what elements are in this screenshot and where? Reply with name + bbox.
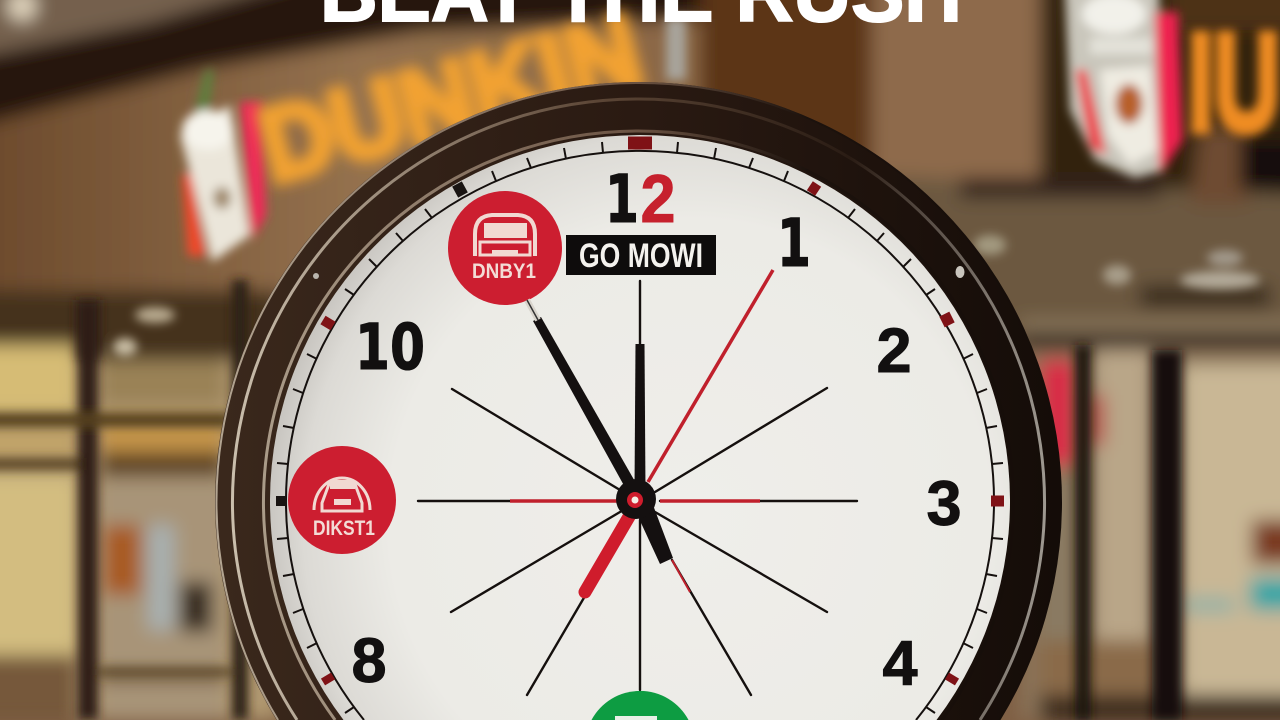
clock face: [270, 135, 1010, 720]
long black hand: [527, 300, 637, 491]
clock hands: [527, 300, 673, 592]
icon: red car badge lower: DIKST1: [313, 517, 375, 540]
vertical black hand: [634, 344, 646, 490]
hour numerals: 1: [777, 205, 811, 282]
clock: [215, 82, 1062, 720]
hour markers: [276, 143, 1004, 682]
hour numerals: 3: [926, 469, 962, 539]
label: go now: GO MOWI: [579, 237, 703, 275]
icon: green badge: [592, 691, 688, 720]
hour numerals: 2: [876, 316, 912, 386]
hour numerals: 2: [640, 161, 676, 237]
short black hand: [636, 505, 673, 564]
hour numerals: [351, 161, 962, 699]
red spoke accents: [510, 270, 773, 592]
blurred sign: Dunkin left: [180, 18, 686, 262]
hour numerals: 8: [351, 626, 387, 696]
spokes: [418, 281, 857, 695]
hour numerals: 10: [355, 311, 425, 384]
hour numerals: 1: [605, 161, 639, 238]
centre hub: [616, 479, 656, 519]
clock frame: [215, 82, 1062, 720]
icon: red car badge upper: [448, 191, 562, 305]
minute track: [277, 142, 1003, 720]
sign cup left: [180, 70, 266, 262]
blurred sign: Dunkin right: [1064, 0, 1280, 178]
hour numerals: 4: [882, 629, 918, 699]
icon: red car badge upper: DNBY1: [472, 260, 536, 283]
icon: red car badge lower: [288, 446, 396, 554]
short red hand: [585, 515, 630, 592]
